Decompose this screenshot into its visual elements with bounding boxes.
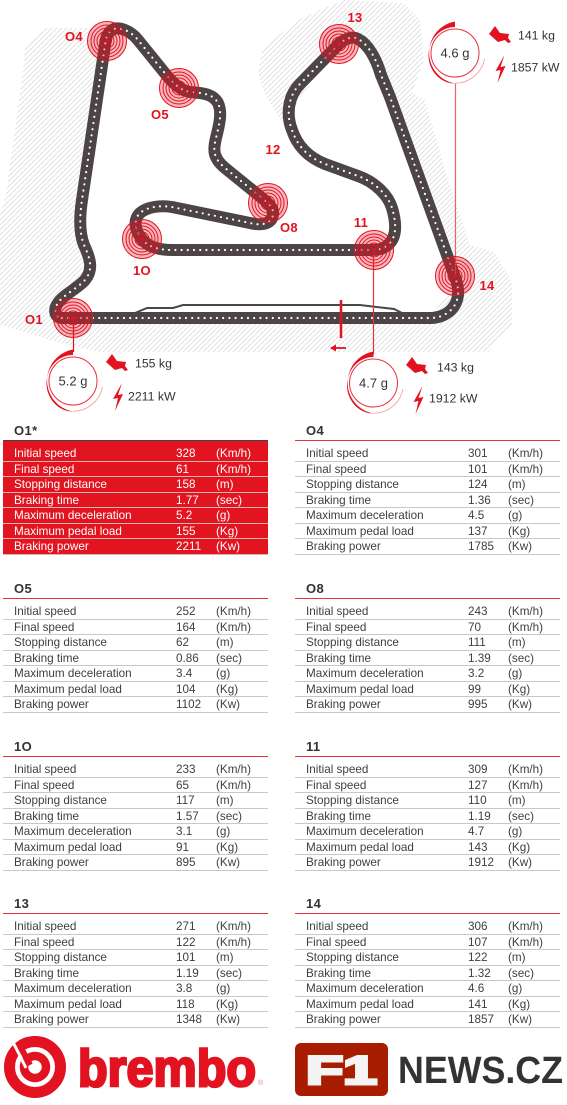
rows: 10: (Km/h) [216, 778, 251, 792]
panel: turn 14 data [295, 913, 560, 1043]
rows: 14: 4.6 [468, 982, 484, 995]
logo: F1 news: F1 [306, 1049, 377, 1093]
turn labels: O1 [25, 312, 43, 327]
gauge readouts: 155 kg [135, 356, 172, 370]
rows: 10 [3, 763, 268, 871]
rows: 10: Initial speed [14, 763, 76, 776]
rows: 08: (Kw) [508, 698, 532, 711]
rows: 14: 1857 [468, 1013, 494, 1026]
rows: 01: (Kw) [216, 540, 240, 553]
heading: 11: 11 [306, 739, 321, 754]
rows: 08: 243 [468, 605, 488, 618]
turn labels: 14 [479, 278, 495, 293]
turn labels: 12 [265, 142, 281, 157]
panel: turn 13 data [3, 913, 268, 1043]
heading: 01: O1* [14, 423, 38, 438]
rows: 05: Maximum deceleration [14, 667, 132, 680]
heading: 14: 14 [306, 896, 321, 911]
rows: 14: 107 [468, 936, 488, 948]
rows: 08: (Km/h) [508, 620, 543, 634]
rows: 10: (Kw) [216, 856, 240, 869]
rows: 11: (Kw) [508, 856, 532, 869]
rows: 14: Braking time [306, 966, 371, 980]
rows: 01 [3, 447, 268, 555]
icon: pedal load, turn 11 [406, 357, 428, 374]
heading: 04: O4 [306, 423, 324, 438]
rows: 11: (m) [508, 794, 526, 807]
rows: 05: (Kg) [216, 682, 238, 696]
rows: 11 [295, 763, 560, 871]
braking point 05 [160, 68, 198, 108]
rows: 08: Braking power [306, 698, 381, 711]
gauge readouts: 2211 kW [128, 390, 176, 404]
rows: 05: (g) [216, 667, 230, 680]
rows: 05: Initial speed [14, 605, 76, 618]
rows: 04: 1.36 [468, 494, 491, 506]
rows: 13: 1.19 [176, 966, 199, 980]
rows: 14: Initial speed [306, 920, 368, 933]
panel: turn 10 data [3, 756, 268, 886]
rows: 14: (sec) [508, 966, 534, 980]
rows: 05: 104 [176, 682, 196, 696]
rows: 01: Braking power [14, 540, 89, 553]
pit lane [135, 305, 404, 314]
rows: 11: 1912 [468, 856, 494, 869]
panel: turn 01 data [3, 440, 268, 554]
icon: power bolt, turn 11 [414, 386, 424, 414]
rows: 10: 233 [176, 763, 196, 776]
rows: 08: (m) [508, 636, 526, 649]
heading: 08: O8 [306, 581, 324, 596]
rows: 01: (g) [216, 509, 230, 522]
rows: 13: Braking time [14, 966, 79, 980]
finish line marker and direction arrow [330, 300, 346, 352]
rows: 10: (m) [216, 794, 234, 807]
rows: 05: (Km/h) [216, 605, 251, 618]
logo: brembo: brembo [78, 1040, 256, 1098]
rows: 14: Final speed [306, 936, 366, 948]
rows: 14: Maximum pedal load [306, 998, 414, 1010]
rows: 11: 309 [468, 763, 488, 776]
rows: 05: 62 [176, 636, 189, 649]
icon: power bolt, turn 01 [113, 383, 123, 411]
braking point 14 [436, 256, 474, 296]
gauge: turn 11: 4.7 g [359, 376, 388, 390]
panel: turn 05 data [3, 598, 268, 728]
gauge readouts: 143 kg [437, 360, 474, 374]
rows: 14: (m) [508, 951, 526, 964]
rows: 08: (sec) [508, 652, 534, 664]
rows: 04: 124 [468, 478, 488, 491]
rows: 01: (Km/h) [216, 447, 251, 460]
rows: 11: Initial speed [306, 763, 368, 776]
gauge readouts: 1857 kW [511, 60, 560, 74]
rows: 04: (Kg) [508, 524, 530, 538]
rows: 11: 110 [468, 794, 487, 807]
rows: 05: 164 [176, 620, 196, 634]
rows: 13: (m) [216, 951, 234, 964]
logo: F1 news [295, 1043, 563, 1096]
turn labels: O5 [151, 107, 169, 122]
heading: 05: O5 [14, 581, 32, 596]
hatched run-off area [0, 0, 512, 352]
rows: 01: (Kg) [216, 524, 238, 538]
rows: 04: 1785 [468, 540, 494, 553]
rows: 08 [295, 605, 560, 713]
rows: 01: 61 [176, 462, 189, 476]
rows: 11: Final speed [306, 778, 366, 792]
icon: pedal load, turn 01 [106, 354, 128, 371]
gauge readouts [128, 28, 560, 406]
rows: 14: 306 [468, 920, 488, 933]
rows: 13: Maximum pedal load [14, 998, 122, 1010]
rows: 14: 141 [468, 998, 488, 1010]
turn labels: 11 [354, 215, 368, 230]
rows: 10: (Kg) [216, 840, 238, 854]
turn labels [25, 10, 495, 327]
rows: 13: (Km/h) [216, 920, 251, 933]
rows: 10: (Km/h) [216, 763, 251, 776]
rows: 04: Braking power [306, 540, 381, 553]
rows: 11: Stopping distance [306, 794, 399, 807]
rows: 11: 1.19 [468, 810, 491, 822]
rows: 08: Maximum deceleration [306, 667, 424, 680]
icon: power bolt, turn 14 [496, 55, 506, 83]
logo: brembo: ® [258, 1079, 264, 1087]
rows: 13: 122 [176, 936, 196, 948]
rows: 08: 111 [468, 636, 486, 649]
rows: 04: Initial speed [306, 447, 368, 460]
rows: 01: (Km/h) [216, 462, 251, 476]
rows: 11: (sec) [508, 810, 534, 822]
rows: 13: (g) [216, 982, 230, 995]
rows: 01: Final speed [14, 462, 74, 476]
panel: turn 08 data [295, 598, 560, 728]
rows: 13: Maximum deceleration [14, 982, 132, 995]
rows: 01: 2211 [176, 540, 201, 553]
rows: 14: 122 [468, 951, 488, 964]
rows: 08: 3.2 [468, 667, 484, 680]
gauge: turn 14 [428, 22, 484, 84]
rows: 10: Maximum deceleration [14, 825, 132, 838]
rows: 11: 143 [468, 840, 488, 854]
rows: 05: (Km/h) [216, 620, 251, 634]
rows: 14: 1.32 [468, 966, 491, 980]
rows: 08: (Km/h) [508, 605, 543, 618]
rows: 04: Maximum pedal load [306, 524, 414, 538]
rows: 10: Braking time [14, 810, 79, 822]
rows: 13: Braking power [14, 1013, 89, 1026]
panel: turn 11 data [295, 756, 560, 886]
rows: 11: (Kg) [508, 840, 530, 854]
braking point 10 [122, 220, 162, 258]
rows: 11: Braking power [306, 856, 381, 869]
rows: 01: 1.77 [176, 494, 199, 506]
rows: 10: 65 [176, 778, 189, 792]
rows: 08: Final speed [306, 620, 366, 634]
rows: 13: 118 [176, 998, 195, 1010]
rows: 10: 91 [176, 840, 189, 854]
rows: 04: (m) [508, 478, 526, 491]
rows: 14: Stopping distance [306, 951, 399, 964]
rows: 01: (sec) [216, 494, 242, 506]
race track [55, 28, 458, 318]
rows: 01: (m) [216, 478, 234, 491]
turn labels: 13 [347, 10, 363, 25]
rows: 11: 127 [468, 778, 488, 792]
heading: 13: 13 [14, 896, 29, 911]
rows: 01: Braking time [14, 494, 79, 506]
rows: 05: 252 [176, 605, 196, 618]
braking point 01 [54, 298, 92, 338]
rows: 04: (sec) [508, 494, 534, 506]
rows: 14: Braking power [306, 1013, 381, 1026]
rows: 10: 117 [176, 794, 195, 807]
rows: 13: (Km/h) [216, 936, 251, 948]
rows: 08: 995 [468, 698, 488, 711]
rows: 05: Braking power [14, 698, 89, 711]
rows: 10: Final speed [14, 778, 74, 792]
rows: 13: (Kw) [216, 1013, 240, 1026]
braking point 13 [320, 24, 358, 64]
rows: 01: 158 [176, 478, 196, 491]
rows: 04: 101 [468, 462, 488, 476]
rows: 04: (Km/h) [508, 462, 543, 476]
rows: 04: 137 [468, 524, 488, 538]
rows: 14: (Km/h) [508, 920, 543, 933]
heading: 10: 1O [14, 739, 32, 754]
rows: 08: 99 [468, 682, 481, 696]
rows: 04: Stopping distance [306, 478, 399, 491]
rows: 04: Final speed [306, 462, 366, 476]
logos [4, 1036, 563, 1098]
rows: 10: Maximum pedal load [14, 840, 122, 854]
rows: 11: Maximum pedal load [306, 840, 414, 854]
rows: 11: 4.7 [468, 825, 484, 838]
rows: 01: Stopping distance [14, 478, 107, 491]
circuit map [0, 0, 560, 414]
rows: 13: Initial speed [14, 920, 76, 933]
turn labels: O8 [280, 220, 298, 235]
rows: 05: 1102 [176, 698, 201, 711]
rows: 01: Maximum deceleration [14, 509, 132, 522]
rows: 14: (Kg) [508, 998, 530, 1010]
rows: 04: (Kw) [508, 540, 532, 553]
gauge: turn 01: 5.2 g [59, 374, 87, 388]
rows: 05: 0.86 [176, 652, 199, 664]
braking point 04 [88, 22, 126, 60]
rows: 04: (Km/h) [508, 447, 543, 460]
icon: pedal load, turn 14 [489, 26, 511, 43]
rows: 14: (g) [508, 982, 522, 995]
gauge: turn 14: 4.6 g [441, 46, 469, 60]
rows: 08: Braking time [306, 652, 371, 664]
rows: 11: (Km/h) [508, 763, 543, 776]
rows: 08: 1.39 [468, 652, 491, 664]
rows: 11: (Km/h) [508, 778, 543, 792]
rows: 08: Maximum pedal load [306, 682, 414, 696]
rows: 04 [295, 447, 560, 555]
rows: 05: (m) [216, 636, 234, 649]
panel: turn 04 data [295, 440, 560, 570]
rows: 08: Initial speed [306, 605, 368, 618]
rows: 10: Stopping distance [14, 794, 107, 807]
gauge readouts: 1912 kW [429, 392, 478, 406]
braking point 08 [248, 184, 288, 222]
rows: 04: (g) [508, 509, 522, 522]
rows: 10: (sec) [216, 810, 242, 822]
rows: 01: 155 [176, 524, 196, 538]
rows: 13: Final speed [14, 936, 74, 948]
rows: 05: Final speed [14, 620, 74, 634]
connector lines [74, 83, 456, 354]
rows: 05 [3, 605, 268, 713]
rows: 01: 328 [176, 447, 196, 460]
rows: 10: Braking power [14, 856, 89, 869]
rows: 04: Braking time [306, 494, 371, 506]
rows: 04: Maximum deceleration [306, 509, 424, 522]
rows: 11: Maximum deceleration [306, 825, 424, 838]
rows: 05: 3.4 [176, 667, 192, 680]
rows: 10: 1.57 [176, 810, 199, 822]
rows: 13: (Kg) [216, 998, 238, 1010]
rows: 14: Maximum deceleration [306, 982, 424, 995]
gauge: turn 11 [347, 352, 403, 414]
rows: 05: (sec) [216, 652, 242, 664]
rows: 05: Maximum pedal load [14, 682, 122, 696]
rows: 08: 70 [468, 620, 481, 634]
rows: 13: Stopping distance [14, 951, 107, 964]
rows: 05: Braking time [14, 652, 79, 664]
turn labels: 1O [133, 263, 151, 278]
rows: 08: Stopping distance [306, 636, 399, 649]
rows: 01: Initial speed [14, 447, 76, 460]
gauge readouts: 141 kg [518, 28, 555, 42]
gauge: turn 01 [46, 350, 102, 412]
braking point 11 [354, 230, 394, 270]
rows: 08: (g) [508, 667, 522, 680]
rows: 10: (g) [216, 825, 230, 838]
rows: 04: 301 [468, 447, 488, 460]
rows: 14 [295, 920, 560, 1028]
rows: 14: (Km/h) [508, 936, 543, 948]
rows: 01: Maximum pedal load [14, 524, 122, 538]
rows: 01: 5.2 [176, 509, 192, 522]
turn labels: O4 [65, 29, 83, 44]
rows: 05: Stopping distance [14, 636, 107, 649]
rows: 08: (Kg) [508, 682, 530, 696]
rows: 05: (Kw) [216, 698, 240, 711]
rows: 14: (Kw) [508, 1013, 532, 1026]
rows: 11: Braking time [306, 810, 371, 822]
rows: 13: 1348 [176, 1013, 202, 1026]
rows: 13: (sec) [216, 966, 242, 980]
rows: 11: (g) [508, 825, 522, 838]
rows: 13: 3.8 [176, 982, 192, 995]
rows: 10: 895 [176, 856, 196, 869]
rows: 04: 4.5 [468, 509, 484, 522]
rows: 10: 3.1 [176, 825, 192, 838]
rows: 13: 271 [176, 920, 196, 933]
rows: 13: 101 [176, 951, 196, 964]
rows: 13 [3, 920, 268, 1028]
